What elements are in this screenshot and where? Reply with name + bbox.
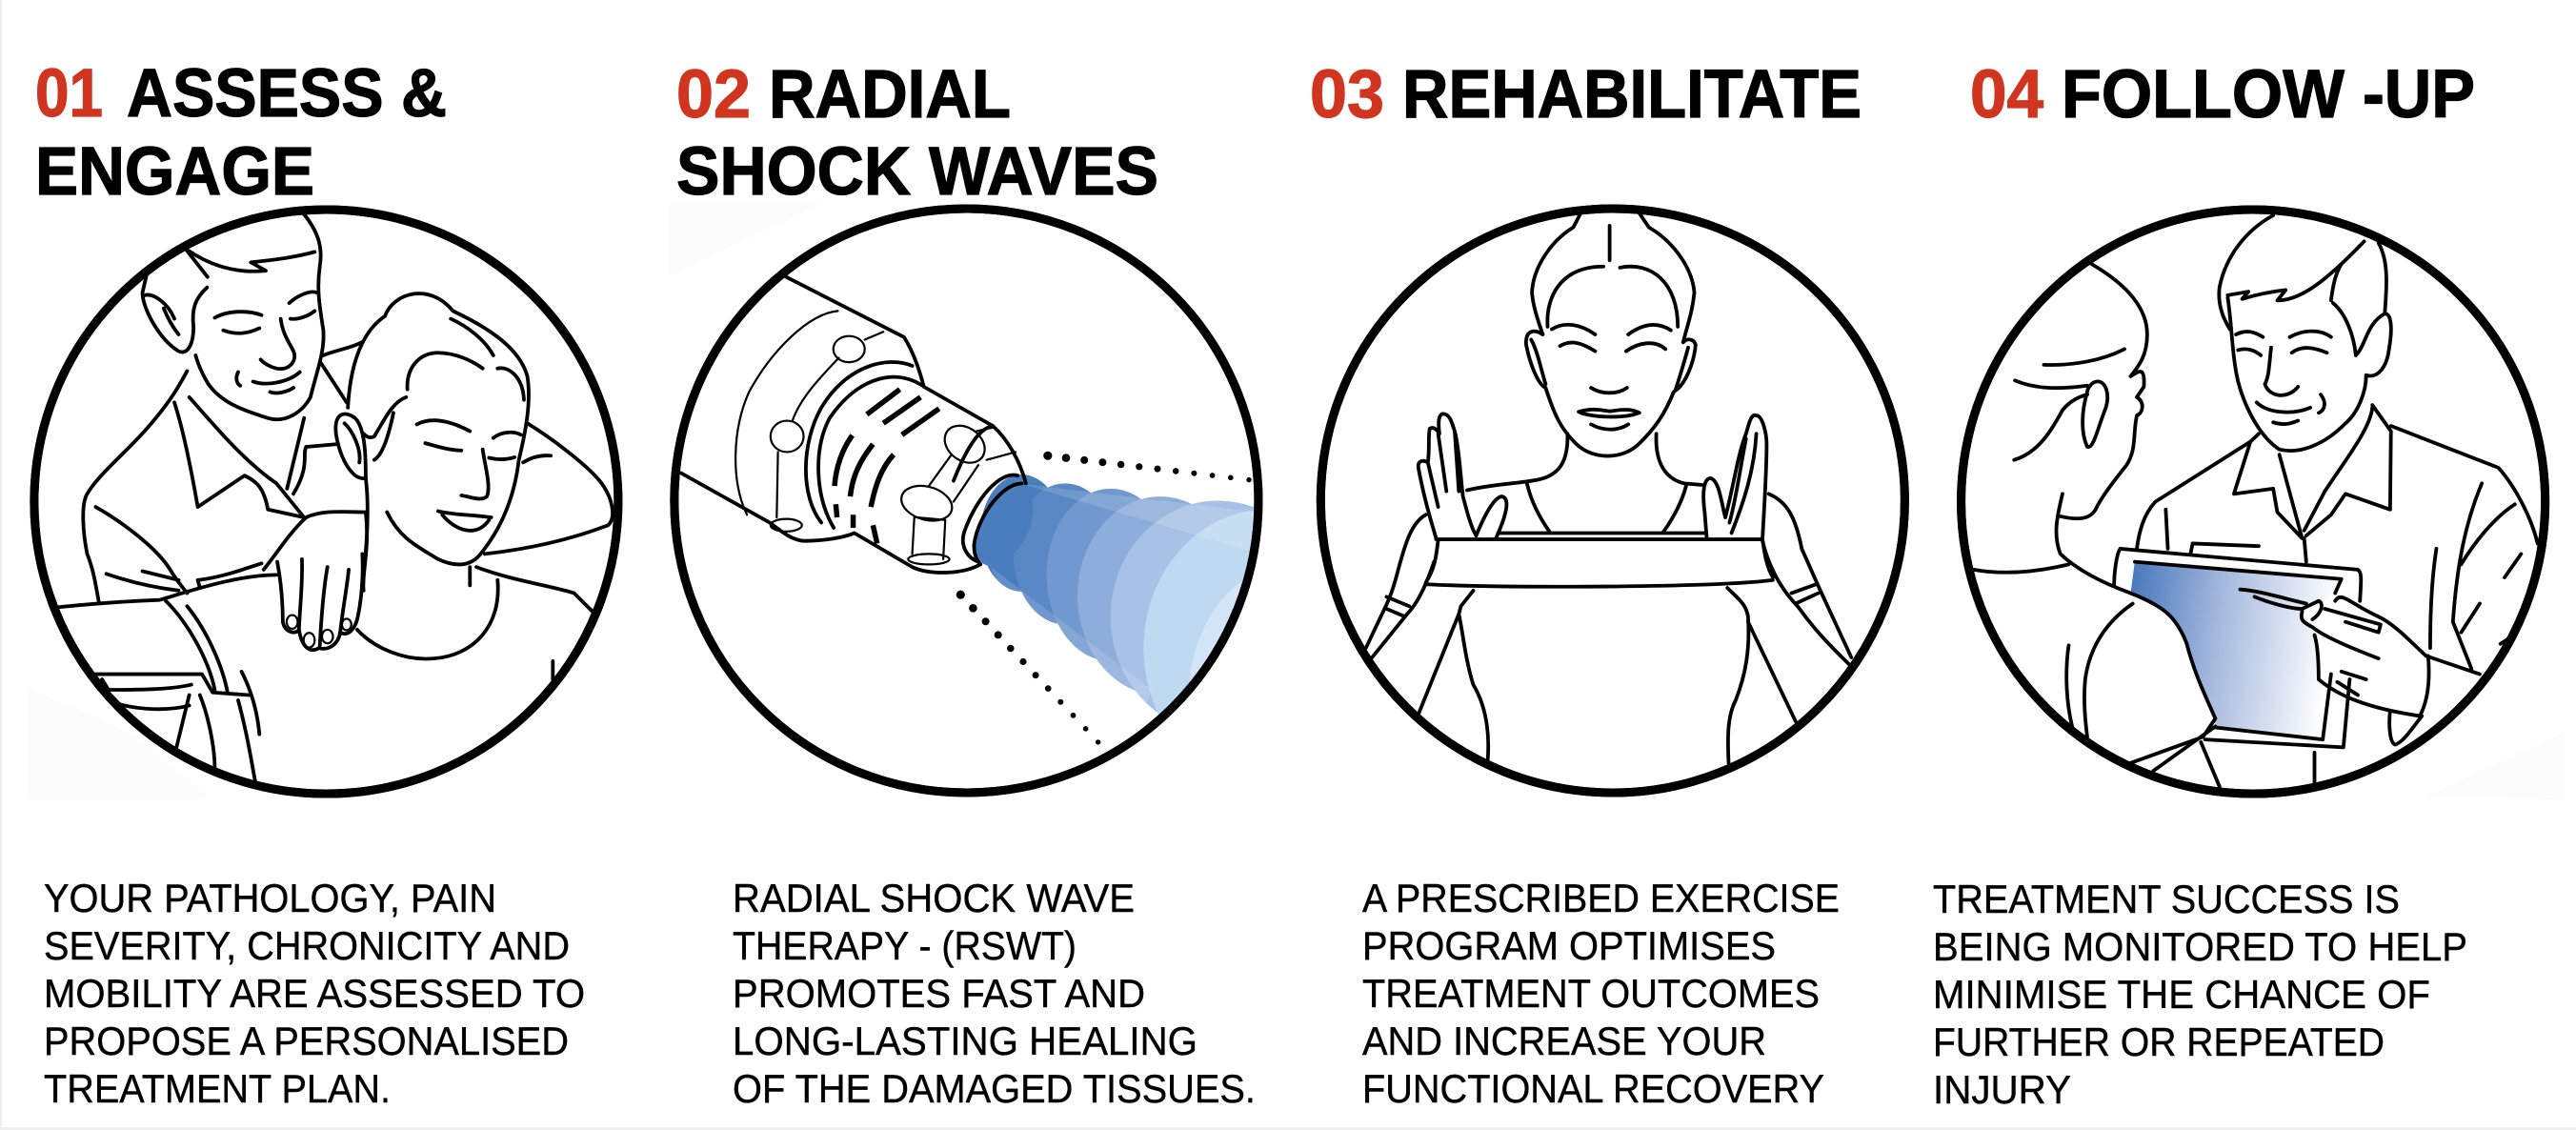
description: step 04: TREATMENT SUCCESS IS bbox=[1933, 877, 2400, 921]
illustration: therapist with hand on patient's shoulder bbox=[28, 210, 618, 799]
heading: 01 assess and engage: ASSESS & bbox=[127, 56, 447, 131]
panel: step 03 rehabilitate bbox=[1310, 57, 1904, 1111]
description: step 02 bbox=[733, 876, 1256, 1111]
description: step 01 bbox=[44, 876, 585, 1111]
description: step 04: BEING MONITORED TO HELP bbox=[1933, 924, 2467, 969]
heading: 02 radial shock waves bbox=[676, 57, 1158, 210]
blue shock waves bbox=[976, 474, 1254, 715]
heading: 04 follow-up: FOLLOW -UP bbox=[2062, 57, 2475, 132]
heading: 02 radial shock waves: RADIAL bbox=[769, 57, 1011, 132]
panel: step 04 follow-up bbox=[1933, 57, 2565, 1112]
heading: 02 radial shock waves: SHOCK WAVES bbox=[676, 134, 1158, 210]
heading: 01 assess and engage: 01 bbox=[35, 56, 103, 131]
description: step 03: PROGRAM OPTIMISES bbox=[1362, 923, 1776, 968]
description: step 04 bbox=[1933, 877, 2467, 1112]
tablet screen bbox=[2131, 562, 2342, 739]
description: step 03: FUNCTIONAL RECOVERY bbox=[1362, 1066, 1824, 1111]
heading: 03 rehabilitate: REHABILITATE bbox=[1402, 57, 1862, 132]
heading: 04 follow-up: 04 bbox=[1970, 57, 2043, 132]
dotted beam outline: upper bbox=[1043, 452, 1252, 482]
description: step 01: YOUR PATHOLOGY, PAIN bbox=[44, 876, 496, 920]
heading: 03 rehabilitate: 03 bbox=[1310, 57, 1384, 132]
description: step 04: INJURY bbox=[1933, 1067, 2071, 1112]
illustration: clinician reviewing tablet with patient bbox=[1962, 210, 2565, 799]
heading: 01 assess and engage bbox=[35, 56, 447, 210]
description: step 02: LONG-LASTING HEALING bbox=[733, 1019, 1197, 1063]
description: step 02: PROMOTES FAST AND bbox=[733, 971, 1145, 1016]
dotted beam outline: lower bbox=[956, 591, 1100, 745]
description: step 02: THERAPY - (RSWT) bbox=[733, 923, 1077, 968]
description: step 01: PROPOSE A PERSONALISED bbox=[44, 1019, 569, 1063]
description: step 04: MINIMISE THE CHANCE OF bbox=[1933, 972, 2430, 1017]
description: step 03: A PRESCRIBED EXERCISE bbox=[1362, 876, 1840, 920]
description: step 03: TREATMENT OUTCOMES bbox=[1362, 971, 1820, 1016]
heading: 01 assess and engage: ENGAGE bbox=[35, 134, 314, 210]
description: step 01: SEVERITY, CHRONICITY AND bbox=[44, 923, 570, 968]
description: step 03 bbox=[1362, 876, 1840, 1111]
description: step 04: FURTHER OR REPEATED bbox=[1933, 1019, 2385, 1064]
description: step 01: MOBILITY ARE ASSESSED TO bbox=[44, 971, 585, 1016]
illustration: woman stretching resistance band bbox=[1320, 209, 1904, 793]
panel: step 02 radial shock waves bbox=[670, 69, 1263, 1103]
panel: step 01 assess and engage bbox=[28, 56, 618, 1111]
description: step 02: RADIAL SHOCK WAVE bbox=[733, 876, 1135, 920]
heading: 02 radial shock waves: 02 bbox=[676, 57, 751, 132]
illustration: shock wave applicator emitting blue waves bbox=[670, 204, 1263, 797]
description: step 01: TREATMENT PLAN. bbox=[44, 1066, 391, 1111]
description: step 02: OF THE DAMAGED TISSUES. bbox=[733, 1066, 1256, 1111]
description: step 03: AND INCREASE YOUR bbox=[1362, 1019, 1766, 1063]
